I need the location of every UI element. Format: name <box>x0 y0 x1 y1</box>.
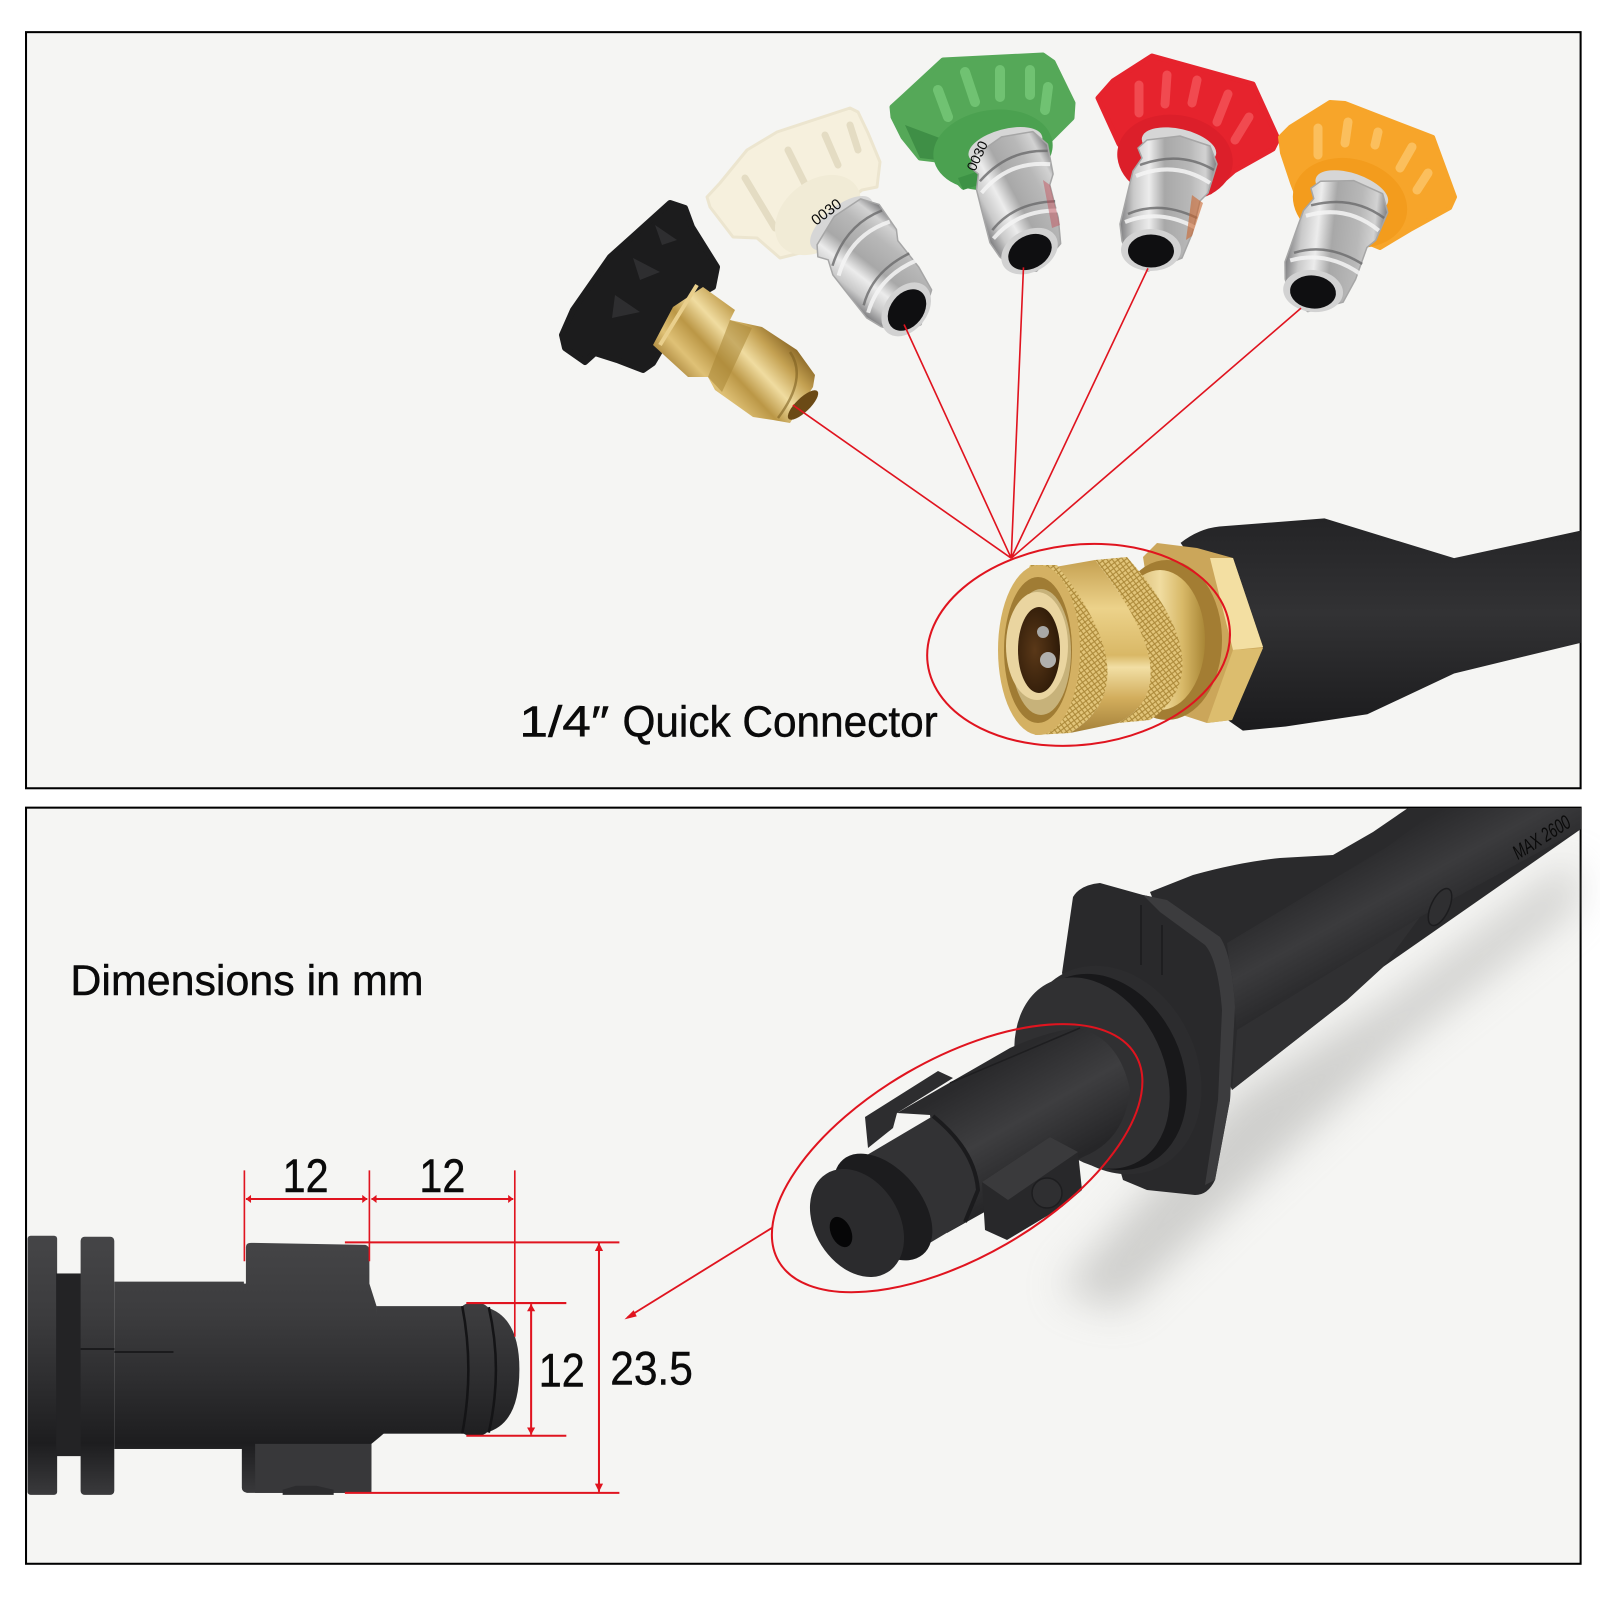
icon: white nozzle: 0030 <box>808 196 845 229</box>
fan of red guide lines <box>793 267 1301 558</box>
dimension: 12 mm lug width <box>244 1150 369 1261</box>
icon: lance shadow <box>1060 860 1575 1310</box>
callout ellipse around connector <box>915 527 1242 763</box>
dimension: 23.5 mm overall: 23.5 <box>610 1343 693 1395</box>
icon: brass quick connector <box>998 543 1263 735</box>
arrow: from adapter tip to profile <box>624 1228 772 1319</box>
icon: side profile of the adapter <box>28 1236 519 1495</box>
icon: white nozzle <box>707 108 965 347</box>
icon: green nozzle: 0030 <box>963 138 991 173</box>
icon: angled lance with flange <box>791 808 1581 1294</box>
icon: red nozzle <box>1098 56 1278 271</box>
panel: nozzles and quick connector <box>26 32 1581 788</box>
dimension: 12 mm tip length: 12 <box>419 1150 465 1202</box>
label: quick connector: 1/4″ <box>519 698 609 747</box>
icon: green nozzle <box>892 55 1100 284</box>
callout ellipse around adapter tip <box>729 969 1185 1347</box>
icon: black nozzle with brass stem <box>562 203 822 424</box>
heading: dimensions in mm: Dimensions in mm <box>70 957 423 1005</box>
dimension: 23.5 mm overall <box>345 1242 693 1493</box>
panel: dimensions in mm <box>26 808 1581 1564</box>
icon: angled lance with flange: MAX 2600 <box>1509 812 1575 864</box>
icon: orange nozzle <box>1280 102 1455 319</box>
hex nut <box>1143 543 1263 723</box>
label: quick connector: Quick Connector <box>622 698 938 747</box>
dimension: 12 mm tip diameter <box>466 1303 585 1436</box>
dimension: 12 mm lug width: 12 <box>283 1150 329 1202</box>
icon: black hose body <box>1181 518 1581 731</box>
dimension: 12 mm tip length <box>371 1150 515 1337</box>
dimension: 12 mm tip diameter: 12 <box>539 1345 585 1397</box>
